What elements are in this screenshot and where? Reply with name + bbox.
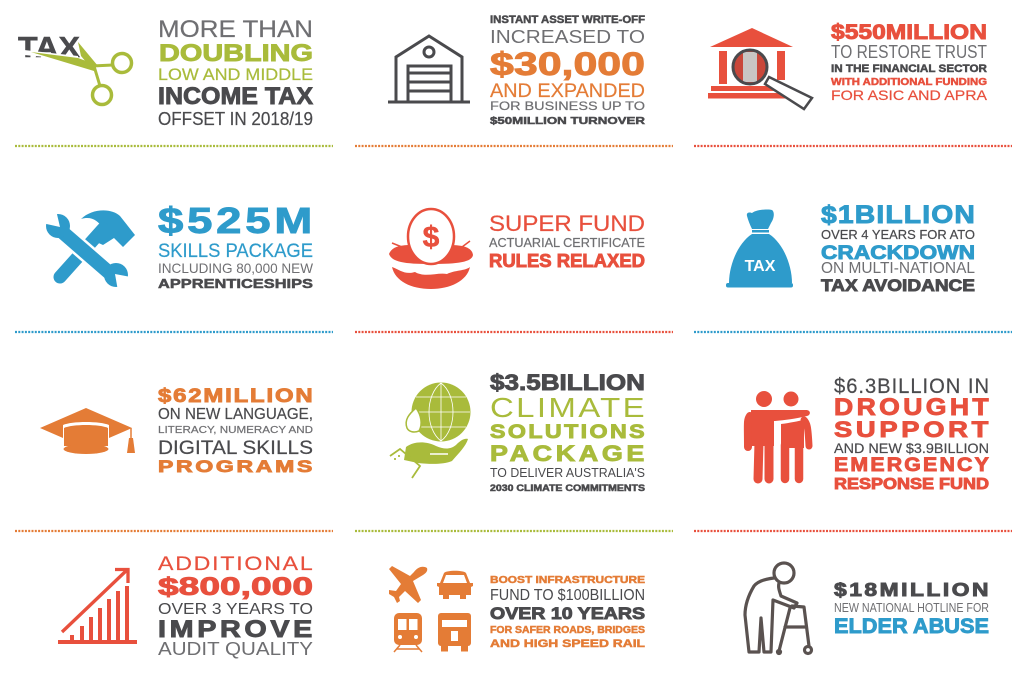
icon: elderly person with walker bbox=[745, 563, 812, 654]
text: instant asset write-off: AND EXPANDED bbox=[490, 80, 645, 102]
icon: money bag bbox=[726, 209, 793, 288]
panel: infrastructure fund bbox=[389, 566, 646, 652]
text: income tax offset: LOW AND MIDDLE bbox=[158, 65, 313, 84]
text: drought support: $6.3BILLION IN bbox=[834, 375, 990, 398]
text: skills package: SKILLS PACKAGE bbox=[158, 240, 313, 262]
panel: audit quality bbox=[58, 553, 316, 659]
text: ATO crackdown: OVER 4 YEARS FOR ATO bbox=[821, 228, 975, 242]
text: climate solutions: SOLUTIONS bbox=[490, 421, 647, 443]
icon: plane, car, train, bus bbox=[389, 566, 473, 652]
text: audit quality: OVER 3 YEARS TO bbox=[158, 601, 313, 618]
text: audit quality: ADDITIONAL bbox=[158, 553, 314, 575]
text: skills package: APPRENTICESHIPS bbox=[158, 277, 313, 291]
icon: scissors cutting tax: TAX bbox=[18, 32, 81, 64]
icon: nest egg: $ bbox=[423, 221, 440, 254]
text: financial sector trust: FOR ASIC AND APRA bbox=[831, 87, 988, 103]
text: drought support: SUPPORT bbox=[834, 417, 992, 442]
panel: super fund bbox=[389, 209, 645, 289]
text: financial sector trust: $550MILLION bbox=[831, 21, 987, 44]
text: instant asset write-off: $30,000 bbox=[490, 46, 645, 82]
text: climate solutions: CLIMATE bbox=[490, 392, 647, 423]
text: instant asset write-off: INCREASED TO bbox=[490, 27, 645, 47]
text: income tax offset: DOUBLING bbox=[159, 41, 313, 67]
panel: elder abuse hotline bbox=[745, 563, 991, 654]
text: climate solutions: $3.5BILLION bbox=[490, 370, 645, 395]
icon: scissors cutting tax bbox=[18, 32, 132, 104]
text: skills package: $525M bbox=[158, 200, 316, 241]
panel: drought support bbox=[748, 375, 992, 493]
text: financial sector trust: IN THE FINANCIAL SECTOR bbox=[831, 63, 987, 75]
icon: two people embracing bbox=[748, 391, 810, 479]
text: climate solutions: TO DELIVER AUSTRALIA'S bbox=[490, 466, 645, 480]
icon: rising bar chart bbox=[58, 570, 137, 644]
text: financial sector trust: TO RESTORE TRUST bbox=[831, 42, 987, 62]
text: infrastructure fund: BOOST INFRASTRUCTURE bbox=[490, 575, 646, 586]
icon: wrench and hammer bbox=[42, 210, 135, 291]
text: financial sector trust bbox=[831, 21, 988, 103]
text: audit quality: $800,000 bbox=[158, 573, 313, 601]
text: drought support bbox=[834, 375, 992, 493]
text: language and digital skills bbox=[158, 385, 315, 476]
text: audit quality bbox=[158, 553, 316, 659]
text: climate solutions bbox=[490, 370, 648, 493]
text: elder abuse hotline: NEW NATIONAL HOTLINE FOR bbox=[834, 601, 989, 615]
text: financial sector trust: WITH ADDITIONAL FUNDING bbox=[831, 77, 987, 88]
text: ATO crackdown: ON MULTI-NATIONAL bbox=[821, 260, 975, 277]
text: super fund: ACTUARIAL CERTIFICATE bbox=[489, 236, 645, 250]
text: income tax offset: OFFSET IN 2018/19 bbox=[158, 109, 313, 129]
text: drought support: DROUGHT bbox=[834, 395, 992, 421]
panel: financial sector trust bbox=[708, 21, 988, 109]
panel: climate solutions bbox=[390, 370, 648, 493]
text: income tax offset bbox=[158, 17, 313, 129]
text: income tax offset: MORE THAN bbox=[158, 17, 313, 43]
text: audit quality: IMPROVE bbox=[158, 617, 316, 643]
text: language and digital skills: ON NEW LANGUAGE, bbox=[158, 406, 313, 423]
panel: ATO crackdown bbox=[726, 201, 976, 295]
icon: graduation cap bbox=[40, 408, 135, 454]
text: super fund: SUPER FUND bbox=[489, 211, 645, 236]
icon: hand holding globe bbox=[390, 382, 470, 478]
text: income tax offset: INCOME TAX bbox=[158, 84, 313, 110]
icon: nest egg bbox=[389, 209, 473, 289]
text: drought support: AND NEW $3.9BILLION bbox=[834, 440, 989, 456]
icon: money bag: TAX bbox=[745, 258, 776, 275]
panel: instant asset write-off bbox=[388, 14, 646, 127]
text: skills package bbox=[158, 200, 316, 291]
text: instant asset write-off: FOR BUSINESS UP TO bbox=[490, 99, 645, 113]
text: climate solutions: PACKAGE bbox=[490, 441, 648, 466]
text: super fund: RULES RELAXED bbox=[489, 251, 645, 271]
text: ATO crackdown: CRACKDOWN bbox=[821, 242, 975, 264]
text: language and digital skills: PROGRAMS bbox=[158, 457, 315, 476]
text: super fund bbox=[489, 211, 645, 271]
text: climate solutions: 2030 CLIMATE COMMITMENTS bbox=[490, 483, 645, 493]
panel: skills package bbox=[42, 200, 316, 291]
text: infrastructure fund: OVER 10 YEARS bbox=[490, 604, 645, 623]
text: language and digital skills: DIGITAL SKILLS bbox=[158, 437, 313, 459]
text: infrastructure fund bbox=[490, 575, 646, 650]
text: audit quality: AUDIT QUALITY bbox=[158, 639, 313, 659]
text: elder abuse hotline bbox=[834, 580, 991, 638]
text: ATO crackdown bbox=[821, 201, 976, 295]
text: drought support: RESPONSE FUND bbox=[834, 476, 989, 493]
text: drought support: EMERGENCY bbox=[834, 454, 991, 476]
text: elder abuse hotline: $18MILLION bbox=[834, 580, 991, 600]
text: infrastructure fund: FOR SAFER ROADS, BRIDGES bbox=[490, 625, 645, 636]
text: skills package: INCLUDING 80,000 NEW bbox=[158, 260, 314, 276]
icon: garage bbox=[388, 36, 470, 102]
panel: language and digital skills bbox=[40, 385, 315, 476]
text: ATO crackdown: TAX AVOIDANCE bbox=[821, 276, 975, 295]
panel: income tax offset bbox=[18, 17, 313, 129]
text: language and digital skills: $62MILLION bbox=[158, 385, 314, 407]
icon: bank under magnifier bbox=[708, 28, 812, 109]
text: instant asset write-off: INSTANT ASSET WRITE-OFF bbox=[490, 14, 645, 26]
text: instant asset write-off: $50MILLION TURNOVER bbox=[490, 116, 646, 127]
text: ATO crackdown: $1BILLION bbox=[821, 201, 976, 229]
text: infrastructure fund: FUND TO $100BILLION bbox=[490, 587, 645, 604]
text: instant asset write-off bbox=[490, 14, 646, 127]
text: infrastructure fund: AND HIGH SPEED RAIL bbox=[490, 638, 645, 650]
text: language and digital skills: LITERACY, NUMERACY AND bbox=[158, 425, 313, 436]
text: elder abuse hotline: ELDER ABUSE bbox=[834, 615, 989, 638]
